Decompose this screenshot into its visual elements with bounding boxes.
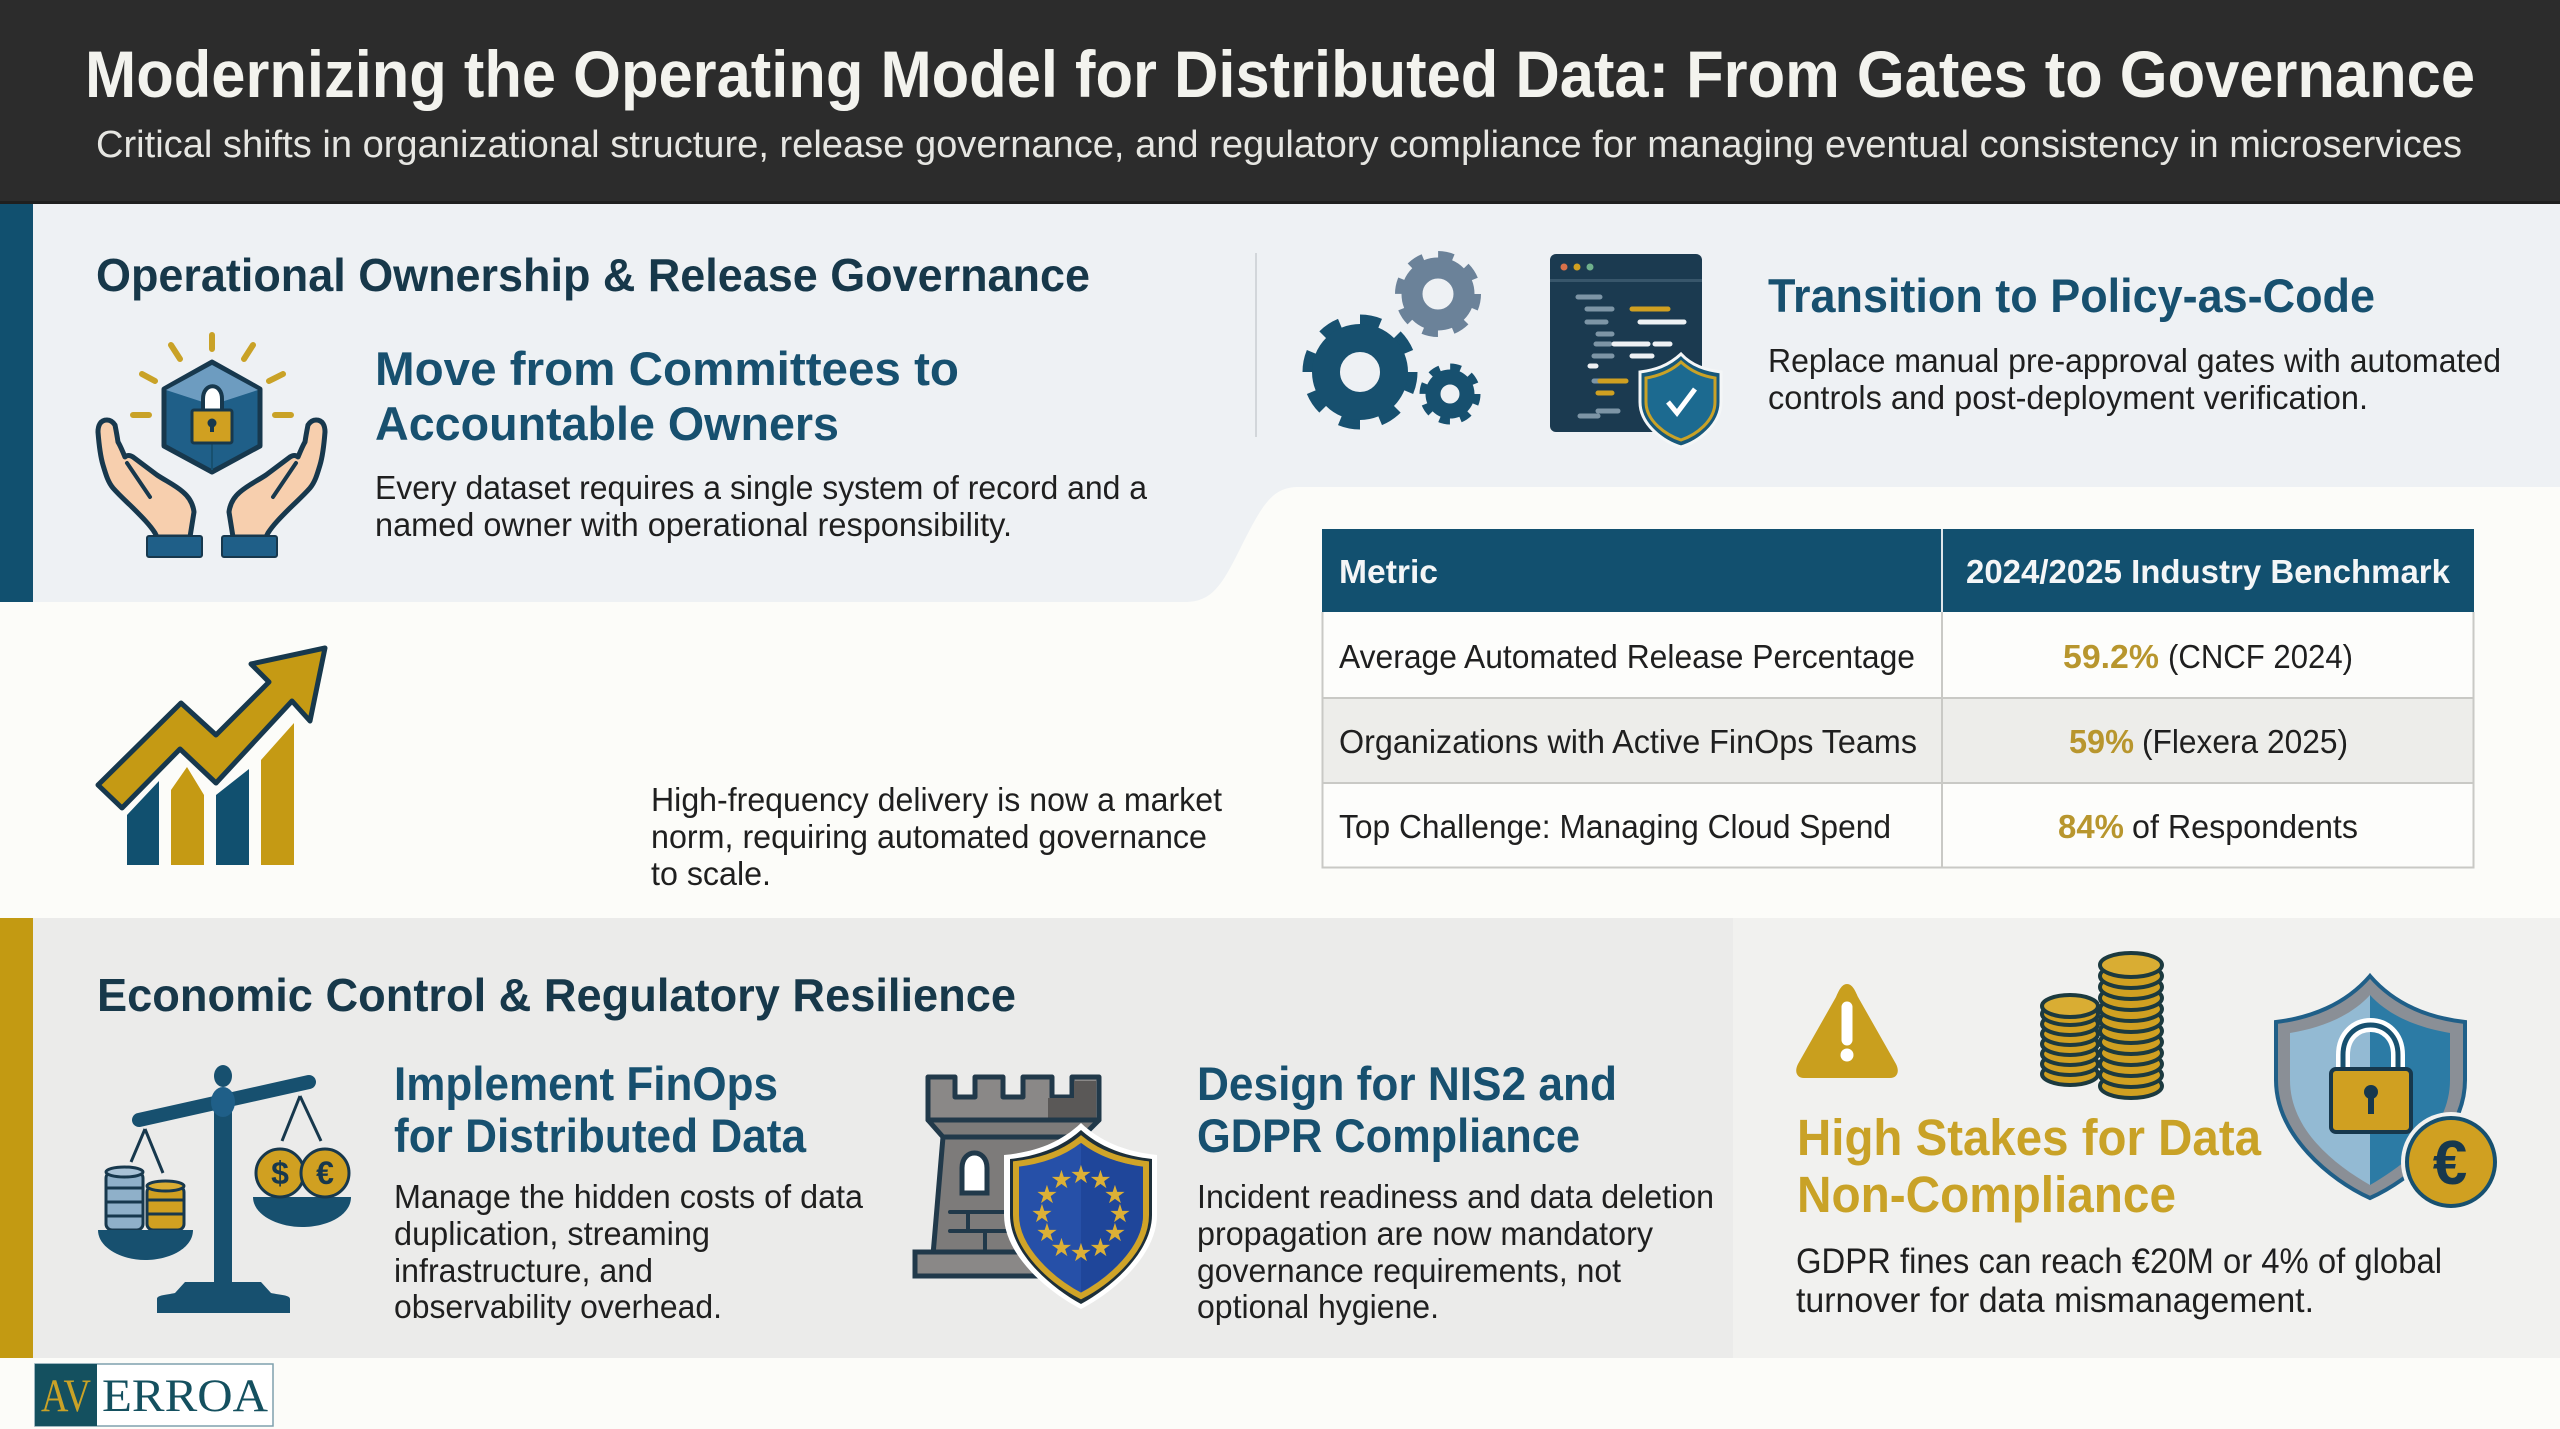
row: finops teams: Organizations with Active FinOps Teams bbox=[1339, 723, 1917, 760]
row: automated release bbox=[1339, 638, 2353, 675]
text: high-frequency delivery bbox=[651, 781, 1222, 892]
card: design for NIS2 and GDPR bbox=[1197, 1057, 1714, 1325]
icon: hands holding locked hexagon bbox=[98, 335, 325, 557]
icon: castle tower with EU shield: ★ bbox=[1089, 1166, 1112, 1194]
icon: rising chart arrow bbox=[98, 648, 325, 865]
card: implement finops: for Distributed Data bbox=[394, 1109, 807, 1162]
table header bbox=[1339, 553, 2451, 590]
icon: castle tower with EU shield: ★ bbox=[1070, 1239, 1092, 1267]
row: finops teams: 59% bbox=[2069, 723, 2134, 760]
card: implement finops: duplication, streaming bbox=[394, 1215, 710, 1252]
callout text: GDPR fines can reach €20M or 4% of global bbox=[1796, 1242, 2442, 1281]
card: design for NIS2 and GDPR: governance requirements, not bbox=[1197, 1252, 1621, 1289]
row: automated release: 59.2% bbox=[2063, 638, 2159, 675]
section heading: Economic Control & Regulatory Resilience bbox=[97, 969, 1016, 1021]
text: high-frequency delivery: High-frequency delivery is now a market bbox=[651, 781, 1222, 818]
callout heading: High Stakes for Data bbox=[1797, 1109, 2262, 1166]
card: transition to policy-as-code: Replace manual pre-approval gates with automated bbox=[1768, 342, 2501, 379]
row: finops teams bbox=[1339, 723, 2348, 760]
table header: 2024/2025 Industry Benchmark bbox=[1966, 553, 2451, 590]
callout text: turnover for data mismanagement. bbox=[1796, 1281, 2314, 1320]
icon: shield with padlock and euro coin bbox=[2276, 976, 2501, 1212]
row: finops teams: (Flexera 2025) bbox=[2142, 723, 2348, 760]
panel: operational ownership and release governance bbox=[0, 204, 2560, 602]
card: move from committees: Accountable Owners bbox=[375, 397, 839, 450]
card: implement finops: infrastructure, and bbox=[394, 1252, 653, 1289]
logo: Averroa bbox=[35, 1364, 273, 1426]
row: automated release: (CNCF 2024) bbox=[2168, 638, 2353, 675]
icon: castle tower with EU shield: ★ bbox=[1050, 1234, 1073, 1262]
card: transition to policy-as-code bbox=[1768, 269, 2501, 416]
icon: castle tower with EU shield: ★ bbox=[1070, 1161, 1092, 1189]
row: automated release: Average Automated Release Percentage bbox=[1339, 638, 1915, 675]
card: design for NIS2 and GDPR: GDPR Compliance bbox=[1197, 1109, 1580, 1162]
icon: code panel with shield bbox=[1550, 254, 1721, 447]
icon: castle tower with EU shield: ★ bbox=[1109, 1200, 1131, 1228]
logo: Averroa: ERROA bbox=[102, 1370, 268, 1422]
subtitle: Critical shifts in organizational structure, release governance, and regulatory compliance for managing eventual consistency in microservices bbox=[96, 124, 2462, 166]
card: transition to policy-as-code: Transition to Policy-as-Code bbox=[1768, 269, 2375, 322]
icon: shield with padlock and euro coin: € bbox=[2433, 1129, 2467, 1198]
card: transition to policy-as-code: controls and post-deployment verification. bbox=[1768, 379, 2368, 416]
header banner bbox=[0, 0, 2560, 204]
icon: castle tower with EU shield: ★ bbox=[1031, 1200, 1053, 1228]
callout text bbox=[1796, 1242, 2442, 1320]
card: design for NIS2 and GDPR: Design for NIS2 and bbox=[1197, 1057, 1617, 1110]
card: implement finops: observability overhead. bbox=[394, 1288, 722, 1325]
card: design for NIS2 and GDPR: propagation are now mandatory bbox=[1197, 1215, 1653, 1252]
icon: warning triangle bbox=[1796, 984, 1898, 1078]
card: design for NIS2 and GDPR: Incident readiness and data deletion bbox=[1197, 1178, 1714, 1215]
section heading: Operational Ownership & Release Governance bbox=[96, 249, 1090, 301]
icon: castle tower with EU shield: ★ bbox=[1104, 1181, 1126, 1209]
icon: castle tower with EU shield: ★ bbox=[1036, 1181, 1058, 1209]
icon: balance scale with coins: $ bbox=[271, 1155, 289, 1191]
card: move from committees: Move from Committees to bbox=[375, 342, 959, 395]
panel: economic control and regulatory resilience bbox=[0, 918, 1733, 1358]
callout heading: Non-Compliance bbox=[1797, 1166, 2176, 1223]
card: implement finops bbox=[394, 1057, 864, 1325]
text: high-frequency delivery: norm, requiring automated governance bbox=[651, 818, 1207, 855]
panel: high stakes callout bbox=[1733, 918, 2560, 1358]
icon: castle tower with EU shield: ★ bbox=[1104, 1219, 1126, 1247]
card: move from committees bbox=[375, 342, 1148, 543]
callout heading bbox=[1797, 1109, 2262, 1223]
icon: castle tower with EU shield bbox=[915, 1077, 1157, 1309]
text: high-frequency delivery: to scale. bbox=[651, 855, 771, 892]
icon: balance scale with coins bbox=[98, 1065, 351, 1313]
benchmark table bbox=[1322, 529, 2474, 868]
card: move from committees: Every dataset requires a single system of record and a bbox=[375, 469, 1148, 506]
row: cloud spend bbox=[1339, 808, 2358, 845]
logo: Averroa: AV bbox=[41, 1370, 91, 1422]
table header: Metric bbox=[1339, 553, 1438, 590]
card: implement finops: Manage the hidden costs of data bbox=[394, 1178, 864, 1215]
card: implement finops: Implement FinOps bbox=[394, 1057, 778, 1110]
row: cloud spend: 84% bbox=[2058, 808, 2124, 845]
row: cloud spend: Top Challenge: Managing Cloud Spend bbox=[1339, 808, 1891, 845]
icon: castle tower with EU shield: ★ bbox=[1036, 1219, 1058, 1247]
icon: gears bbox=[1308, 255, 1477, 424]
card: move from committees: named owner with operational responsibility. bbox=[375, 506, 1012, 543]
row: cloud spend: of Respondents bbox=[2132, 808, 2358, 845]
icon: coin stacks bbox=[2042, 953, 2162, 1098]
card: design for NIS2 and GDPR: optional hygiene. bbox=[1197, 1288, 1439, 1325]
icon: castle tower with EU shield: ★ bbox=[1089, 1234, 1112, 1262]
icon: castle tower with EU shield: ★ bbox=[1050, 1166, 1073, 1194]
icon: balance scale with coins: € bbox=[316, 1155, 334, 1191]
